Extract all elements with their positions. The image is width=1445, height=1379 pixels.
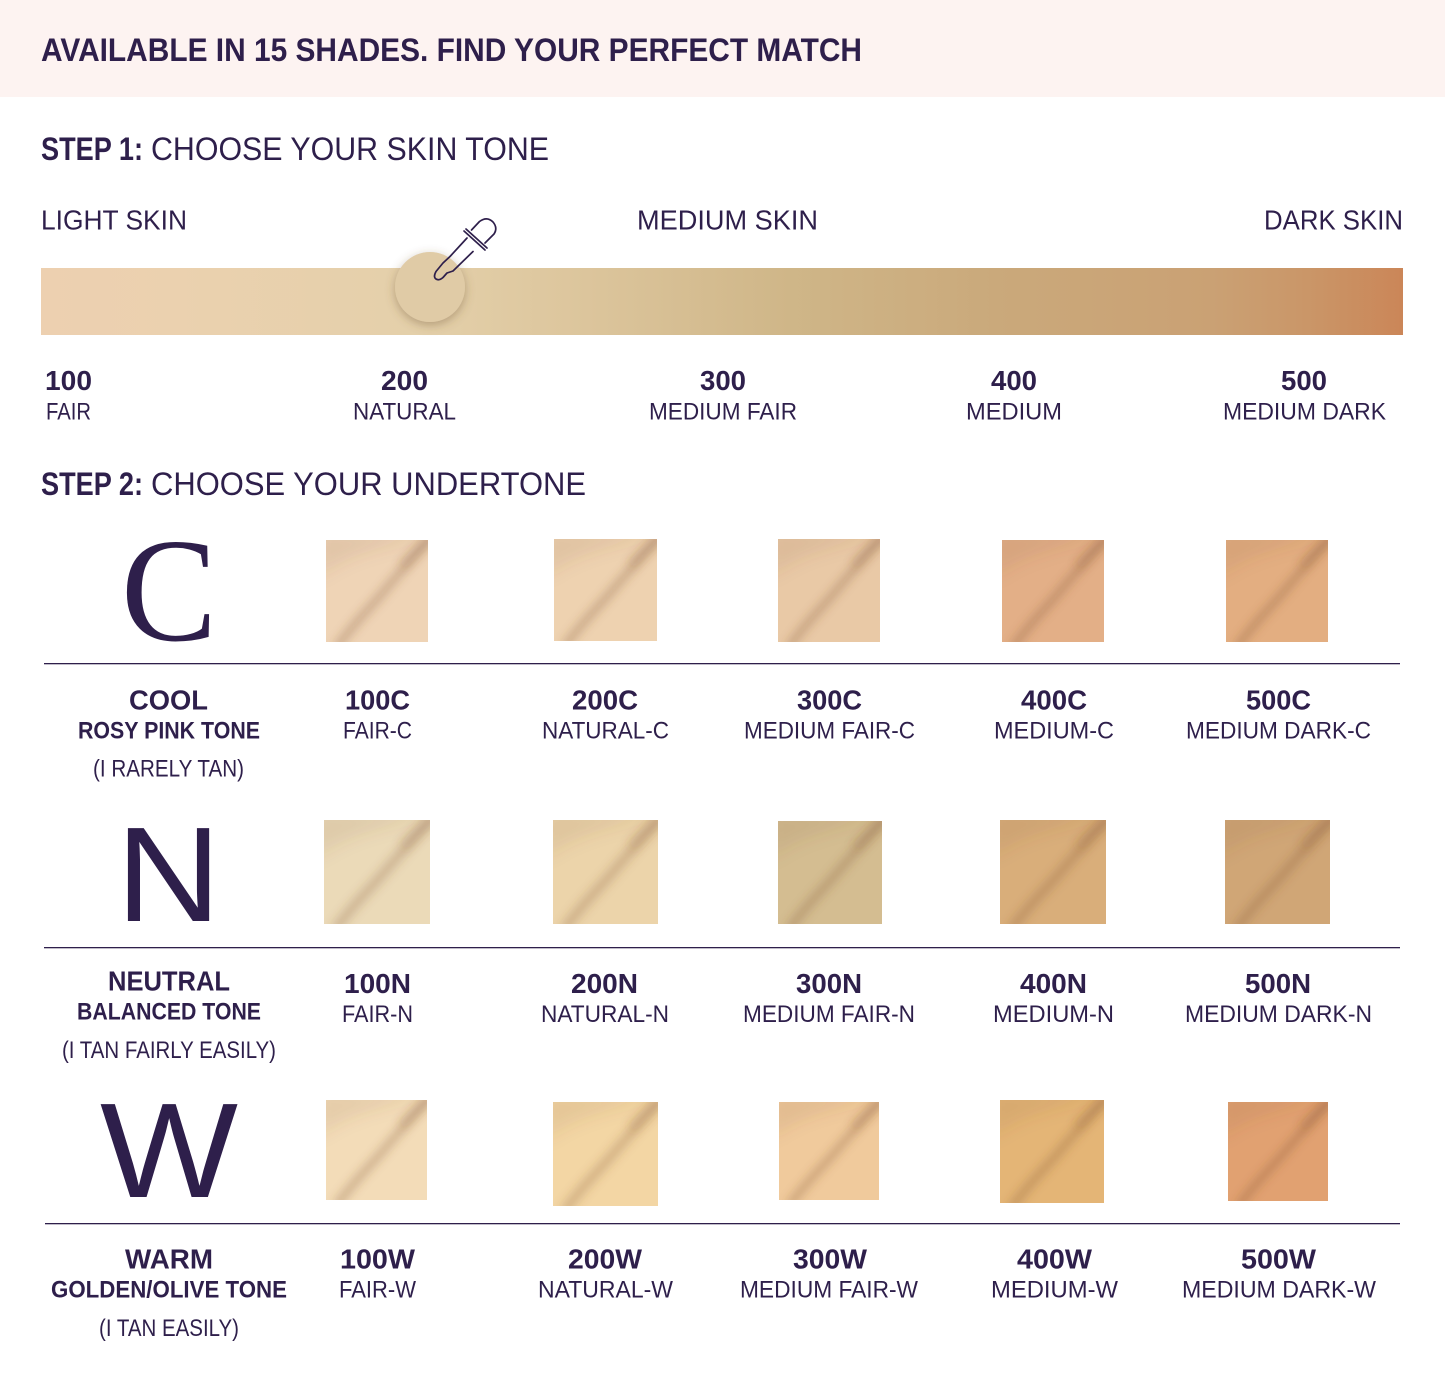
level 200: [353, 365, 456, 426]
level 200: 200: [381, 365, 428, 396]
warm shade labels: 500W: [1241, 1244, 1317, 1274]
neutral shade labels: NATURAL-N: [541, 1001, 669, 1028]
cool description: [78, 684, 260, 782]
neutral shade labels: 200N: [571, 968, 638, 999]
level 500: 500: [1281, 365, 1327, 396]
title: AVAILABLE IN 15 SHADES. FIND YOUR PERFECT MATCH: [41, 32, 862, 68]
cool description: ROSY PINK TONE: [78, 718, 260, 744]
panel: warm undertone: [45, 1075, 1400, 1342]
neutral description: BALANCED TONE: [77, 998, 261, 1026]
warm shade labels: 400W: [1017, 1244, 1093, 1274]
level 100: [45, 365, 92, 426]
warm shade labels: MEDIUM-W: [991, 1276, 1118, 1304]
level 300: MEDIUM FAIR: [649, 398, 797, 426]
warm shade labels: 300W: [793, 1244, 868, 1274]
neutral shade labels: MEDIUM-N: [993, 1001, 1114, 1028]
cool shade labels: 500C: [1246, 684, 1311, 716]
cool shade labels: 100C: [345, 684, 410, 716]
neutral shade labels: 500N: [1245, 968, 1311, 999]
scale labels: [41, 204, 1403, 236]
scale labels: DARK SKIN: [1264, 204, 1403, 236]
picker circle: [395, 252, 465, 322]
level 500: [1223, 365, 1386, 426]
cool shade labels: FAIR-C: [343, 718, 412, 744]
warm shade labels: MEDIUM FAIR-W: [740, 1276, 918, 1304]
cool description: COOL: [129, 684, 208, 716]
gradient bar: [41, 268, 1403, 335]
cool shade labels: MEDIUM FAIR-C: [744, 718, 915, 744]
level 300: 300: [700, 365, 746, 396]
cool shade labels: [343, 684, 1371, 744]
neutral shade labels: 100N: [344, 968, 411, 999]
level 400: [966, 365, 1062, 426]
divider: [45, 1223, 1400, 1224]
scale labels: MEDIUM SKIN: [637, 204, 818, 236]
heading: step 1: STEP 1:: [41, 131, 143, 167]
level 100: 100: [45, 365, 92, 396]
level 100: FAIR: [46, 398, 91, 426]
cool shade labels: 300C: [797, 684, 862, 716]
panel: neutral undertone: [44, 799, 1400, 1064]
tone levels: [45, 365, 1386, 426]
neutral swatches: [313, 810, 1340, 930]
warm shade labels: FAIR-W: [339, 1276, 416, 1304]
divider: [44, 663, 1400, 664]
level 500: MEDIUM DARK: [1223, 398, 1386, 426]
neutral shade labels: [342, 968, 1372, 1028]
neutral shade labels: 300N: [796, 968, 862, 999]
level 300: [649, 365, 797, 426]
neutral shade labels: 400N: [1020, 968, 1087, 999]
cool shade labels: MEDIUM DARK-C: [1186, 718, 1371, 744]
warm swatches: [316, 1090, 1338, 1212]
warm shade labels: NATURAL-W: [538, 1276, 673, 1304]
cool description: (I RARELY TAN): [93, 756, 244, 782]
cool shade labels: NATURAL-C: [542, 718, 669, 744]
scale labels: LIGHT SKIN: [41, 204, 187, 236]
neutral description: NEUTRAL: [108, 966, 230, 996]
warm shade labels: 200W: [568, 1244, 643, 1274]
neutral shade labels: MEDIUM DARK-N: [1185, 1001, 1372, 1028]
neutral shade labels: MEDIUM FAIR-N: [743, 1001, 915, 1028]
cool shade labels: 200C: [572, 684, 638, 716]
cool swatches: [316, 529, 1338, 648]
neutral shade labels: FAIR-N: [342, 1001, 413, 1028]
warm description: [51, 1244, 287, 1342]
warm shade labels: 100W: [340, 1244, 416, 1274]
header banner: [0, 0, 1445, 97]
panel: cool undertone: [44, 509, 1400, 782]
divider: [44, 947, 1400, 948]
icon: dropper: [434, 219, 496, 280]
neutral description: [62, 966, 276, 1064]
warm shade labels: [339, 1244, 1376, 1304]
warm shade labels: MEDIUM DARK-W: [1182, 1276, 1376, 1304]
heading: step 2: CHOOSE YOUR UNDERTONE: [151, 466, 586, 502]
warm description: GOLDEN/OLIVE TONE: [51, 1276, 287, 1304]
warm description: WARM: [125, 1244, 213, 1274]
level 200: NATURAL: [353, 398, 456, 426]
letter N: N: [116, 799, 221, 950]
level 400: 400: [991, 365, 1037, 396]
cool shade labels: 400C: [1021, 684, 1087, 716]
letter W: W: [100, 1075, 238, 1226]
heading: step 2: STEP 2:: [41, 466, 143, 502]
level 400: MEDIUM: [966, 398, 1062, 426]
letter C: C: [121, 509, 217, 673]
neutral description: (I TAN FAIRLY EASILY): [62, 1037, 276, 1064]
skin tone scale: [41, 204, 1403, 335]
heading: step 1: CHOOSE YOUR SKIN TONE: [151, 131, 549, 167]
warm description: (I TAN EASILY): [99, 1315, 239, 1342]
cool shade labels: MEDIUM-C: [994, 718, 1114, 744]
